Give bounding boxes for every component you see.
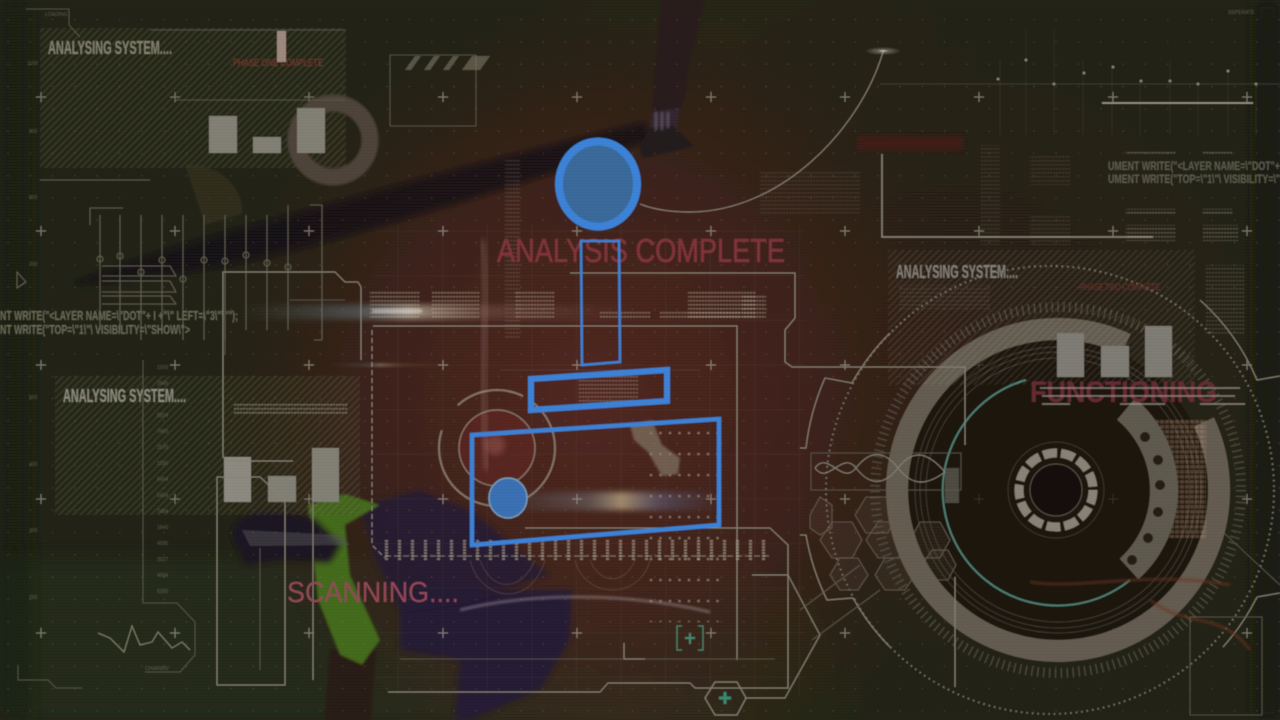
teal bracket marker <box>677 626 703 650</box>
number column: 1500 <box>157 365 168 371</box>
red streak <box>858 136 963 150</box>
teal hexagon marker <box>705 682 746 715</box>
heading: scanning: SCANNING.... <box>287 577 459 609</box>
pink dotted block <box>1150 420 1206 538</box>
player shadow on the grass <box>72 122 650 284</box>
large slanted frame <box>472 419 719 545</box>
striped readout <box>234 402 348 414</box>
number column: 5454 <box>157 493 168 499</box>
dot grid near map <box>648 430 723 622</box>
axis labels left: 200 <box>29 595 38 601</box>
waveform chart: CH4ANNV <box>145 666 170 672</box>
number column: 2527 <box>157 557 168 563</box>
scanned heading: analysis complete: ANALYSIS COMPLETE <box>497 232 785 269</box>
teal arc <box>943 380 1130 606</box>
axis labels left: 800 <box>29 195 38 201</box>
dark inner disc <box>908 340 1208 640</box>
right data blocks <box>980 145 1245 335</box>
small circle <box>489 478 527 518</box>
dotted outer ring <box>826 266 1274 714</box>
number column: 5350 <box>157 589 168 595</box>
blue connector graphic <box>472 142 719 545</box>
lower player: legs, shirt, vest, head <box>232 490 572 720</box>
curve chart with star <box>640 47 901 215</box>
axis labels left: 300 <box>29 528 38 534</box>
DNA helix box <box>811 453 961 490</box>
axis labels left: 400 <box>29 462 38 468</box>
number column: 7400 <box>157 429 168 435</box>
ring chart <box>296 103 370 177</box>
inner band with dots <box>1126 409 1164 569</box>
solid outer arc pieces <box>800 300 1280 647</box>
bar chart <box>224 448 339 502</box>
top right node chart <box>858 10 1280 237</box>
axis labels left: 700 <box>29 262 38 268</box>
small loading label: LOADING <box>45 12 68 18</box>
side vertical lines <box>808 367 965 687</box>
upper player legs and boot <box>640 0 704 158</box>
target circles <box>439 390 555 506</box>
axis labels left: 500 <box>29 395 38 401</box>
left frame brackets <box>217 272 385 685</box>
number column: 5824 <box>157 413 168 419</box>
text rows <box>900 285 990 309</box>
label: phase two complete: PHASE TWO COMPLETE <box>1080 282 1160 293</box>
heading: analysing system: ANALYSING SYSTEM.... <box>48 38 172 58</box>
data rows centre <box>370 160 766 403</box>
number column: 4684 <box>157 573 168 579</box>
lens flares <box>240 305 720 612</box>
loading bracket <box>26 9 80 37</box>
thick grey ring <box>897 329 1219 651</box>
bottom right red map scribble <box>1030 579 1262 715</box>
number column: 4586 <box>157 541 168 547</box>
tall rectangle <box>581 241 620 365</box>
slanted bar <box>531 370 667 410</box>
vertical pink plume <box>482 240 487 470</box>
heading: analysing system: ANALYSING SYSTEM.... <box>63 386 186 406</box>
world map fragment <box>630 420 680 476</box>
number column: 2545 <box>157 381 168 387</box>
label: phase one complete: PHASE ONE COMPLETE <box>233 58 323 69</box>
slider lines with nodes <box>17 180 322 340</box>
code text left: NT WRITE("<LAYER NAME=\"DOT"+ I +"\" LEFT=\"3\"\""); <box>0 308 238 323</box>
number column: 7454 <box>157 509 168 515</box>
code text right <box>1108 161 1280 186</box>
axis labels left: 1100 <box>27 61 38 67</box>
heading: analysing system: ANALYSING SYSTEM.... <box>896 262 1018 282</box>
hexagon cluster <box>810 497 956 590</box>
bar chart <box>209 31 325 153</box>
heading: functioning: FUNCTIONING <box>1030 376 1217 409</box>
code text left: NT WRITE("TOP=\"1\"\ VISIBILITY=\"SHOW\"> <box>0 322 190 337</box>
waveform chart <box>18 360 195 688</box>
axis labels left <box>27 61 38 601</box>
concentric ripples <box>470 560 650 594</box>
number column: 1840 <box>157 525 168 531</box>
half disc <box>185 165 242 225</box>
number column: 2570 <box>157 445 168 451</box>
axis labels left: 900 <box>29 129 38 135</box>
number column: 5454 <box>157 477 168 483</box>
small label: SEPERATE <box>1228 10 1255 16</box>
pillar ticks row <box>385 540 770 560</box>
corner frame <box>882 154 1153 237</box>
panel: right analysing system <box>888 250 1195 385</box>
tick ring <box>875 307 1241 673</box>
bar chart <box>1057 326 1172 377</box>
white overlay bars <box>1040 388 1245 404</box>
code text left <box>0 308 238 337</box>
big circular HUD <box>800 266 1280 714</box>
panel: lower-left analysing system <box>55 376 360 515</box>
top circle <box>559 142 637 226</box>
central frame lines <box>150 30 820 698</box>
white rule <box>1102 102 1253 104</box>
thin rings <box>915 347 1201 633</box>
number column: 1590 <box>157 461 168 467</box>
panel: upper-left analysing system <box>40 12 370 225</box>
centre segmented gear <box>1019 453 1093 527</box>
number column <box>157 365 168 595</box>
